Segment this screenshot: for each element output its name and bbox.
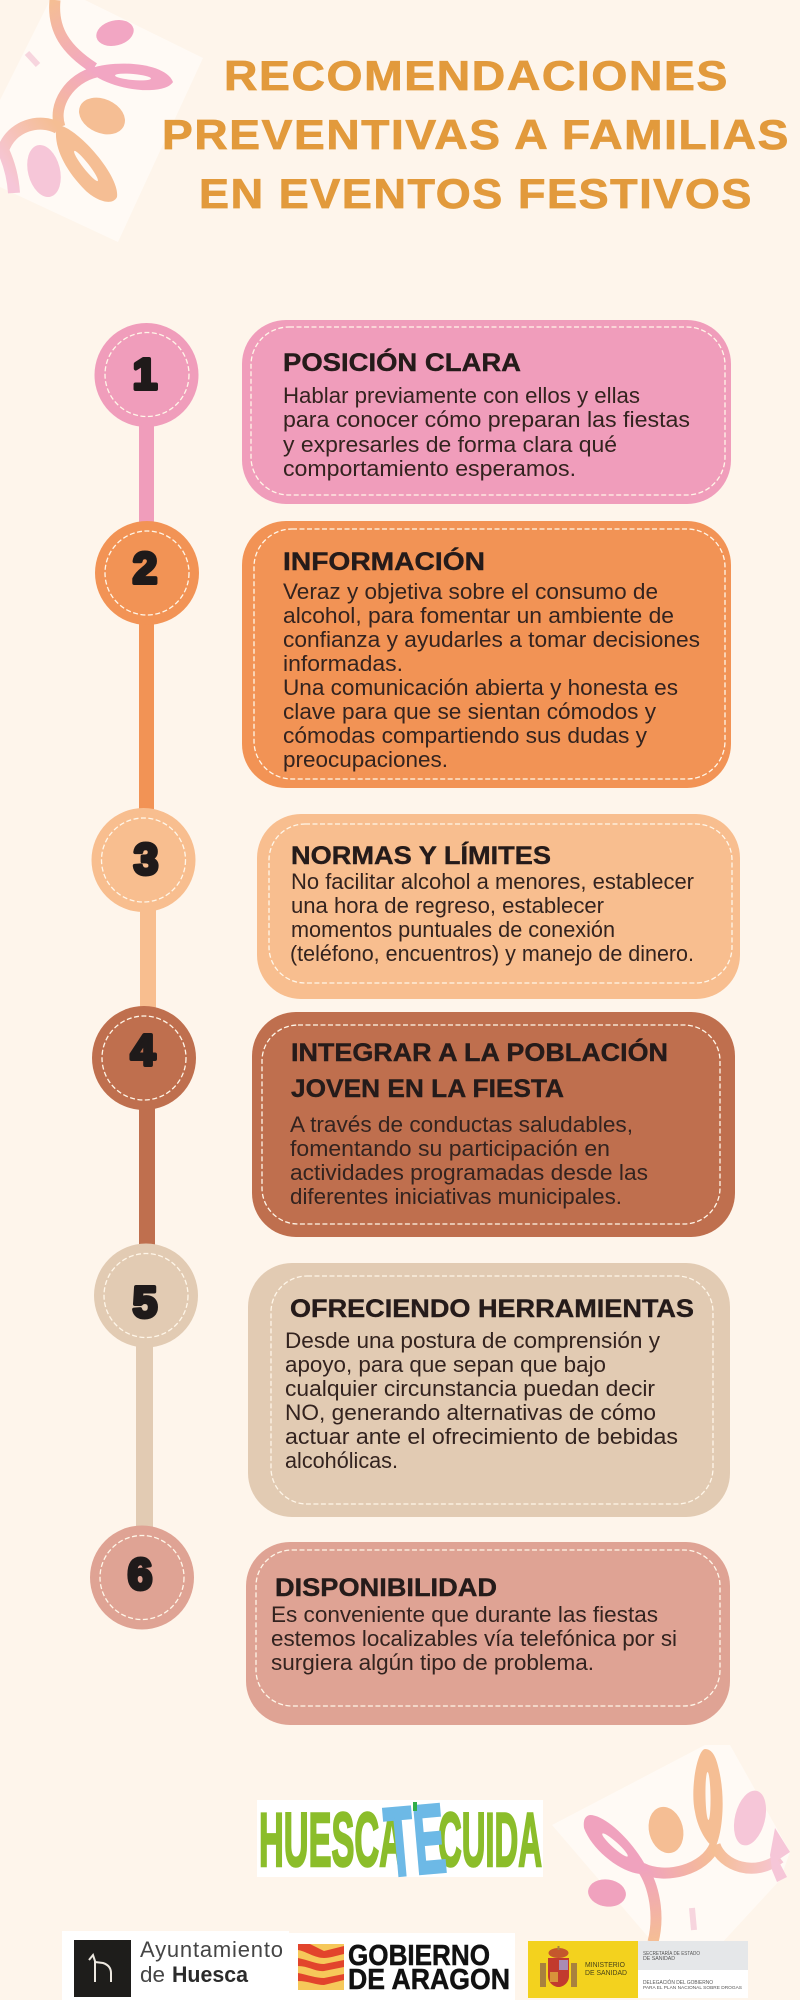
text block: integrar a la población joven — [290, 1112, 648, 1209]
decoration: top-left swirl — [0, 0, 203, 242]
title: PREVENTIVAS A FAMILIAS — [162, 111, 790, 158]
logo: Huesca te cuida — [257, 1783, 543, 1897]
text block: ofreciendo herramientas — [285, 1328, 678, 1473]
step 3 marker — [92, 808, 196, 912]
heading: integrar a la población joven — [291, 1037, 668, 1103]
logo: Ayuntamiento de Huesca: Huesca — [172, 1962, 249, 1987]
logo: Ministerio de Sanidad — [528, 1941, 748, 1998]
step 2 marker: 2 — [133, 544, 157, 593]
title: EN EVENTOS FESTIVOS — [199, 170, 753, 217]
timeline connector: step 4 to 5 — [139, 1105, 155, 1247]
text block: información: preocupaciones. — [283, 747, 448, 772]
logo: Gobierno de Aragón — [289, 1933, 515, 2000]
text block: información: Veraz y objetiva sobre el consumo de — [283, 579, 658, 604]
heading: posición clara: POSICIÓN CLARA — [283, 347, 521, 377]
heading: disponibilidad: DISPONIBILIDAD — [275, 1574, 497, 1602]
heading: normas y límites: NORMAS Y LÍMITES — [291, 841, 551, 870]
step 3 marker: 3 — [134, 835, 158, 884]
panel: disponibilidad — [246, 1542, 730, 1725]
decoration: bottom-right swirl — [552, 1745, 790, 1945]
step 4 marker: 4 — [131, 1026, 156, 1075]
text block: información — [283, 579, 700, 772]
step 2 marker — [95, 521, 199, 625]
logo: Ministerio de Sanidad: SECRETARÍA DE ESTADO — [643, 1950, 700, 1957]
text block: información: confianza y ayudarles a tomar decisiones — [283, 627, 700, 652]
icon: Aragon flag — [298, 1944, 344, 1990]
step 1 marker — [94, 323, 198, 427]
text block: disponibilidad — [271, 1602, 677, 1675]
text block: ofreciendo herramientas: cualquier circunstancia puedan decir — [285, 1376, 656, 1401]
text block: normas y límites: (teléfono, encuentros) y manejo de dinero. — [290, 941, 694, 966]
text block: disponibilidad: Es conveniente que durante las fiestas — [271, 1602, 658, 1627]
text block: posición clara: comportamiento esperamos. — [283, 456, 576, 481]
heading: integrar a la población joven: INTEGRAR A LA POBLACIÓN — [291, 1037, 668, 1067]
step 6 marker — [90, 1526, 194, 1630]
logo: Ayuntamiento de Huesca: de — [140, 1962, 165, 1987]
text block: normas y límites: No facilitar alcohol a menores, establecer — [291, 869, 694, 894]
title: RECOMENDACIONES — [224, 52, 729, 99]
text block: información: clave para que se sientan cómodos y — [283, 699, 657, 724]
timeline connector: step 1 to 2 — [139, 420, 154, 525]
text block: información: informadas. — [283, 651, 403, 676]
logo: Ministerio de Sanidad: DE SANIDAD — [585, 1968, 628, 1977]
logo: Ministerio de Sanidad: DELEGACIÓN DEL GOBIERNO — [643, 1979, 713, 1986]
text block: integrar a la población joven: fomentando su participación en — [290, 1136, 610, 1161]
panel: normas y límites — [257, 814, 740, 999]
logo: Ministerio de Sanidad: DE SANIDAD — [643, 1956, 675, 1962]
text block: información: alcohol, para fomentar un ambiente de — [283, 603, 674, 628]
text block: posición clara: y expresarles de forma clara qué — [283, 432, 617, 457]
text block: ofreciendo herramientas: Desde una postura de comprensión y — [285, 1328, 661, 1353]
logo: Gobierno de Aragón: GOBIERNO — [348, 1940, 490, 1972]
step 5 marker: 5 — [133, 1278, 157, 1327]
text block: normas y límites — [290, 869, 694, 966]
title — [162, 52, 790, 217]
text block: integrar a la población joven: A través de conductas saludables, — [290, 1112, 633, 1137]
text block: ofreciendo herramientas: actuar ante el ofrecimiento de bebidas — [285, 1424, 678, 1449]
text block: ofreciendo herramientas: alcohólicas. — [285, 1448, 398, 1473]
panel: integrar a la población joven — [252, 1012, 735, 1237]
heading: integrar a la población joven: JOVEN EN LA FIESTA — [291, 1075, 564, 1103]
logo: Huesca te cuida: TE — [380, 1783, 450, 1897]
step 1 marker: 1 — [133, 350, 157, 399]
panel: información — [242, 521, 731, 788]
heading: ofreciendo herramientas: OFRECIENDO HERRAMIENTAS — [290, 1295, 694, 1323]
text block: ofreciendo herramientas: NO, generando alternativas de cómo — [285, 1400, 656, 1425]
step 6 marker: 6 — [128, 1550, 152, 1599]
panel: ofreciendo herramientas — [248, 1263, 730, 1517]
logo: Ministerio de Sanidad: PARA EL PLAN NACIONAL SOBRE DROGAS — [643, 1985, 742, 1990]
text block: integrar a la población joven: diferentes iniciativas municipales. — [290, 1184, 622, 1209]
text block: normas y límites: momentos puntuales de conexión — [291, 917, 615, 942]
text block: posición clara: Hablar previamente con ellos y ellas — [283, 383, 640, 408]
icon: horse on black square — [74, 1940, 131, 1997]
panel: posición clara — [242, 320, 731, 504]
text block: información: Una comunicación abierta y honesta es — [283, 675, 678, 700]
logo: Huesca te cuida: HUESCA — [259, 1798, 404, 1883]
text block: posición clara: para conocer cómo preparan las fiestas — [283, 407, 690, 432]
step 4 marker — [92, 1006, 196, 1110]
timeline connector: step 3 to 4 — [140, 908, 156, 1010]
text block: disponibilidad: surgiera algún tipo de problema. — [271, 1650, 594, 1675]
text block: información: cómodas compartiendo sus dudas y — [283, 723, 648, 748]
heading: información: INFORMACIÓN — [283, 546, 485, 576]
step 5 marker — [94, 1244, 198, 1348]
logo: Ayuntamiento de Huesca: Ayuntamiento — [140, 1937, 283, 1962]
logo: Ministerio de Sanidad: MINISTERIO — [585, 1960, 625, 1969]
text block: ofreciendo herramientas: apoyo, para que sepan que bajo — [285, 1352, 606, 1377]
timeline connector: step 2 to 3 — [139, 620, 154, 812]
timeline connector: step 5 to 6 — [136, 1343, 153, 1529]
text block: normas y límites: una hora de regreso, establecer — [291, 893, 604, 918]
text block: posición clara — [283, 383, 690, 481]
logo: Ayuntamiento de Huesca — [62, 1931, 289, 2000]
text block: integrar a la población joven: actividades programadas desde las — [290, 1160, 648, 1185]
text block: disponibilidad: estemos localizables vía telefónica por si — [271, 1626, 677, 1651]
text: CUIDA — [438, 1798, 542, 1883]
icon: coat of arms — [540, 1946, 577, 1987]
logo: Gobierno de Aragón: DE ARAGON — [348, 1964, 510, 1996]
